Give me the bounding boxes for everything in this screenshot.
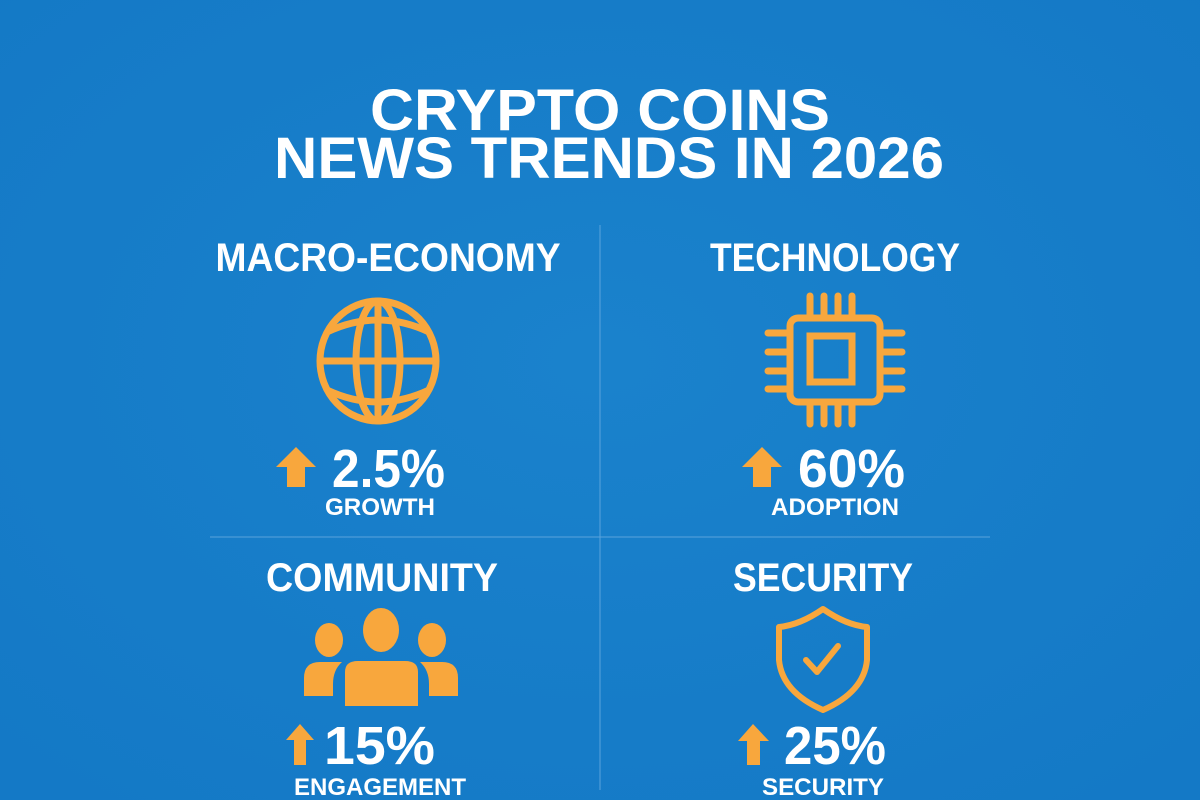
stat: 60% adoption: 60% xyxy=(798,439,905,499)
stat: 2.5% growth xyxy=(276,439,445,521)
heading: technology: TECHNOLOGY xyxy=(710,236,960,280)
title: NEWS TRENDS IN 2026 xyxy=(274,126,944,191)
title: CRYPTO COINS xyxy=(370,78,830,143)
icon: people xyxy=(304,608,458,706)
title xyxy=(274,78,944,191)
stat: 25% security xyxy=(738,716,886,800)
stat: 60% adoption xyxy=(742,439,905,521)
heading: security: SECURITY xyxy=(733,556,913,600)
stat: 25% security: 25% xyxy=(784,716,886,776)
panel: security xyxy=(733,556,913,800)
heading: macro-economy: MACRO-ECONOMY xyxy=(216,236,561,280)
stat: 15% engagement: 15% xyxy=(324,716,435,776)
stat: 2.5% growth: GROWTH xyxy=(325,494,435,521)
icon: shield xyxy=(779,609,867,710)
panel: technology xyxy=(710,236,960,521)
heading: community: COMMUNITY xyxy=(266,556,498,600)
stat: 15% engagement xyxy=(286,716,466,800)
icon: chip xyxy=(768,296,902,424)
stat: 60% adoption: ADOPTION xyxy=(771,494,899,521)
stat: 2.5% growth: 2.5% xyxy=(332,439,445,499)
panel: macro-economy xyxy=(216,236,561,521)
icon: globe xyxy=(320,301,436,421)
panel: community xyxy=(266,556,498,800)
